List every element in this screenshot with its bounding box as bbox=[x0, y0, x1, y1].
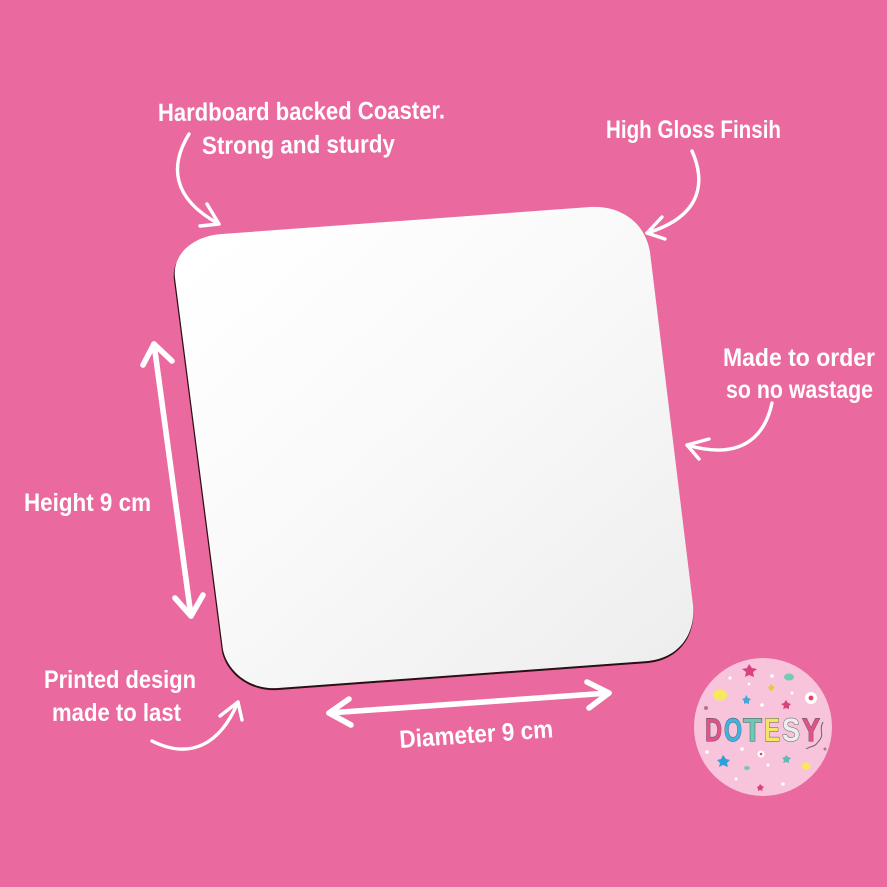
logo wordmark: D bbox=[705, 712, 722, 748]
logo decorations: stars, hearts and dots bbox=[704, 664, 826, 791]
callout: printed design: Printed design bbox=[44, 666, 196, 694]
logo wordmark: S bbox=[782, 712, 800, 748]
logo badge: Dotesy bbox=[694, 658, 832, 796]
arrow: diameter dimension bbox=[329, 682, 609, 725]
callout: hardboard backed coaster bbox=[158, 96, 445, 160]
arrow: gloss callout to coaster corner bbox=[647, 151, 699, 239]
callout: hardboard backed coaster: Strong and sturdy bbox=[202, 130, 395, 160]
logo wordmark: T bbox=[743, 712, 762, 748]
callout: made to order: Made to order bbox=[723, 344, 875, 372]
height label: Height 9 cm bbox=[24, 489, 151, 517]
arrow: printed design callout to coaster corner bbox=[152, 702, 242, 749]
logo signature scribble bbox=[806, 722, 823, 749]
callout: printed design bbox=[44, 666, 196, 727]
logo wordmark: Y bbox=[802, 712, 820, 748]
arrow: height dimension bbox=[143, 344, 203, 616]
callout: high gloss finish: High Gloss Finsih bbox=[606, 116, 781, 144]
callout: printed design: made to last bbox=[52, 699, 182, 727]
arrow: made to order callout to coaster edge bbox=[687, 403, 772, 459]
callout: made to order bbox=[723, 344, 875, 404]
logo wordmark bbox=[705, 712, 820, 748]
logo wordmark: O bbox=[724, 712, 742, 748]
logo wordmark: E bbox=[764, 712, 780, 748]
coaster product bbox=[174, 207, 693, 690]
diameter label: Diameter 9 cm bbox=[398, 715, 554, 754]
arrow: hardboard callout to coaster corner bbox=[177, 134, 219, 226]
callout: hardboard backed coaster: Hardboard backed Coaster. bbox=[158, 96, 445, 127]
